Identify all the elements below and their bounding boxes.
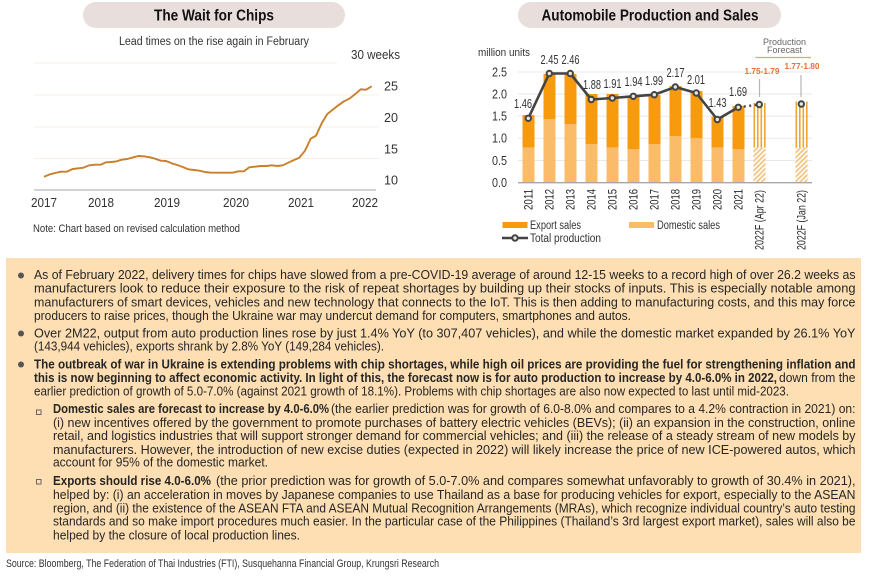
x axis labels: 2017 bbox=[31, 195, 57, 210]
x axis labels: 2020 bbox=[223, 195, 249, 210]
y axis labels: 1.0 bbox=[492, 130, 507, 146]
year labels: 2013 bbox=[566, 189, 578, 210]
legend: Domestic sales bbox=[657, 220, 720, 232]
data labels: 1.91 bbox=[604, 77, 622, 91]
forecast labels: 1.77-1.80 bbox=[784, 61, 820, 71]
x axis labels bbox=[31, 195, 378, 210]
year labels: 2011 bbox=[524, 189, 536, 210]
year labels bbox=[524, 189, 808, 250]
bullet: chip delivery times bbox=[18, 268, 856, 323]
forecast labels: 1.75-1.79 bbox=[744, 66, 780, 76]
data labels: 1.88 bbox=[583, 78, 601, 92]
data labels: 1.43 bbox=[708, 96, 727, 110]
data labels: 2.17 bbox=[666, 66, 685, 80]
year labels: 2014 bbox=[586, 189, 598, 210]
data labels: 2.01 bbox=[687, 73, 705, 87]
sub-bullet: domestic sales: Domestic sales are forecast to increase by 4.0-6.0% bbox=[53, 402, 329, 416]
bullet: 2M22 output bbox=[18, 326, 856, 354]
panel: commentary bbox=[6, 258, 861, 553]
legend bbox=[502, 220, 720, 245]
sub-bullet: exports: helped by the closure of local production lines. bbox=[53, 529, 300, 543]
year labels: 2021 bbox=[734, 189, 746, 210]
bullet: chip delivery times: manufacturers of smart devices, vehicles and new technology that connects to the IoT. This is then adding to manufacturing costs, and this may force bbox=[34, 295, 856, 309]
y axis labels: 0.5 bbox=[492, 153, 507, 168]
year labels: 2012 bbox=[544, 189, 556, 210]
sub-bullet: exports bbox=[36, 474, 856, 543]
bullet: Ukraine war and forecast: earlier prediction of growth of 5.0-7.0% (against 2021 growth of 18.1%). Problems with chip shortages are also now expected to last until mid-2023. bbox=[34, 385, 789, 399]
legend: Total production bbox=[530, 233, 601, 245]
sub-bullet: domestic sales: (the earlier prediction was for growth of 6.0-8.0% and compares to a 4.2% contraction in 2021) on: bbox=[331, 402, 856, 416]
forecast labels: Forecast bbox=[767, 45, 803, 55]
sub-bullet: exports: helped by: (i) an acceleration in moves by Japanese companies to use Thailand as a base for producing vehicles for export, especially to the ASEAN bbox=[53, 488, 856, 502]
sub-bullet: domestic sales: manufacturers. However, the introduction of new excise duties (expected in 2022) will likely increase the price of new ICE-powered autos, which bbox=[53, 443, 856, 457]
heading: Automobile Production and Sales: Automobile Production and Sales bbox=[542, 8, 759, 24]
forecast labels bbox=[744, 37, 820, 76]
data labels: 1.46 bbox=[514, 97, 532, 111]
year labels: 2016 bbox=[628, 189, 640, 210]
unit label: million units bbox=[478, 47, 530, 59]
year labels: 2015 bbox=[608, 189, 620, 210]
bullet: chip delivery times: As of February 2022, delivery times for chips have slowed from a pre-COVID-19 average of around 12-15 weeks to a record high of over 26.2 weeks as bbox=[34, 268, 856, 282]
heading: The Wait for Chips: The Wait for Chips bbox=[154, 8, 274, 24]
y axis labels: 10 bbox=[384, 172, 398, 188]
sub-bullet: domestic sales bbox=[36, 402, 856, 470]
domestic sales bars bbox=[522, 119, 744, 183]
bar chart: automobile production and sales bbox=[478, 37, 820, 250]
bullet: Ukraine war and forecast: down from the bbox=[779, 371, 856, 385]
year labels: 2019 bbox=[692, 189, 704, 210]
data labels bbox=[514, 53, 747, 111]
legend: Export sales bbox=[530, 220, 581, 232]
y axis labels: 30 weeks bbox=[351, 47, 400, 62]
y axis labels bbox=[492, 64, 507, 190]
sub-bullet: exports: Exports should rise 4.0-6.0% bbox=[53, 474, 211, 488]
chart subtitle: Lead times on the rise again in February bbox=[119, 36, 309, 48]
year labels: 2022F (Apr 22) bbox=[754, 190, 766, 250]
bullet: 2M22 output: Over 2M22, output from auto production lines rose by just 1.4% YoY (to 307,407 vehicles), and while the domestic market expanded by 26.1% YoY bbox=[34, 326, 856, 340]
data labels: 1.94 bbox=[624, 75, 643, 89]
bullet: chip delivery times: manufacturers look to reduce their exposure to the risk of repeat shortages by building up their stocks of inputs. This is especially notable among bbox=[34, 282, 856, 296]
chart note: Note: Chart based on revised calculation method bbox=[33, 223, 240, 235]
forecast bars bbox=[754, 75, 808, 183]
x axis labels: 2021 bbox=[288, 195, 314, 210]
year labels: 2020 bbox=[712, 189, 724, 210]
sub-bullet: domestic sales: (i) new incentives offered by the government to promote purchases of battery electric vehicles (BEVs); (ii) an expansion in the construction, online bbox=[53, 416, 856, 430]
y axis labels bbox=[351, 47, 400, 188]
line chart: chip lead times bbox=[31, 36, 400, 210]
y axis labels: 2.5 bbox=[492, 64, 507, 80]
y axis labels: 1.5 bbox=[492, 108, 507, 124]
sub-bullet: domestic sales: account for 95% of the domestic market. bbox=[53, 456, 268, 470]
forecast labels: Production bbox=[763, 37, 806, 47]
y axis labels: 25 bbox=[384, 78, 398, 94]
sub-bullet: domestic sales: retail, and logistics industries that will support stronger demand for commercial vehicles; and (iii) the release of a steady stream of new models by bbox=[53, 429, 856, 443]
bullet: Ukraine war and forecast bbox=[18, 357, 856, 399]
bullet: chip delivery times: producers to raise prices, though the Ukraine war may undercut demand for computers, smartphones and autos. bbox=[34, 309, 631, 323]
export sales bars bbox=[522, 74, 744, 149]
sub-bullet: exports: (the prior prediction was for growth of 5.0-7.0% and compares somewhat unfavorably to growth of 30.4% in 2021), bbox=[216, 474, 856, 488]
bullet: Ukraine war and forecast: this is now beginning to affect economic activity. In light of this, the forecast now is for auto production to increase by 4.0-6.0% in 2022, bbox=[34, 371, 777, 385]
year labels: 2018 bbox=[670, 189, 682, 210]
data labels: 2.45 bbox=[540, 53, 559, 67]
x axis labels: 2022 bbox=[352, 195, 378, 210]
data labels: 2.46 bbox=[562, 53, 580, 67]
y axis labels: 20 bbox=[384, 110, 398, 125]
heading: The Wait for Chips bbox=[83, 2, 345, 28]
y axis labels: 0.0 bbox=[492, 175, 507, 190]
data labels: 1.99 bbox=[645, 74, 663, 88]
source line: Source: Bloomberg, The Federation of Thai Industries (FTI), Susquehanna Financial Group, Krungsri Research bbox=[6, 558, 439, 570]
x axis labels: 2019 bbox=[154, 195, 180, 210]
y axis labels: 2.0 bbox=[492, 86, 507, 102]
data labels: 1.69 bbox=[729, 85, 747, 99]
year labels: 2022F (Jan 22) bbox=[796, 190, 808, 250]
total production line bbox=[526, 71, 804, 122]
x axis labels: 2018 bbox=[88, 195, 114, 210]
bullet: 2M22 output: (143,944 vehicles), exports shrank by 2.8% YoY (149,284 vehicles). bbox=[34, 340, 384, 354]
y axis labels: 15 bbox=[384, 142, 398, 156]
heading: Automobile Production and Sales bbox=[518, 2, 781, 28]
year labels: 2017 bbox=[650, 189, 662, 210]
